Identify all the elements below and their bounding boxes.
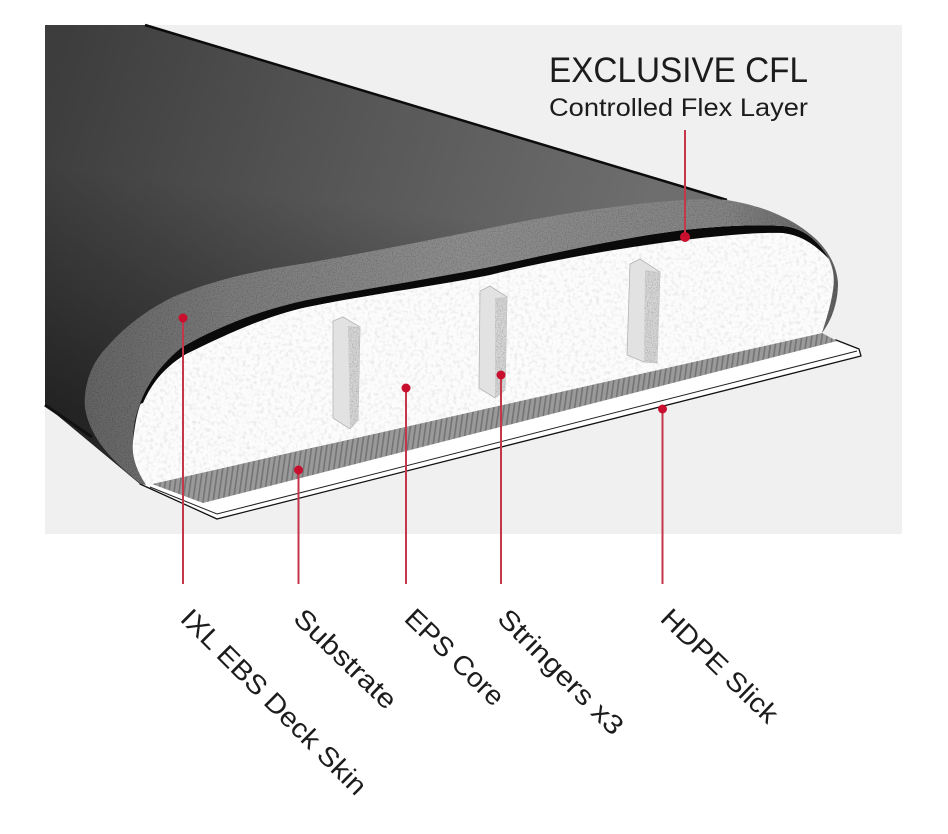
label: HDPE Slick: HDPE Slick <box>655 603 785 730</box>
label: EPS Core: EPS Core <box>399 603 510 712</box>
leader line: HDPE slick <box>658 404 667 584</box>
leader line: deck skin <box>178 314 188 584</box>
leader line: EPS core <box>402 384 410 584</box>
IXL EBS deck skin rail <box>85 199 838 485</box>
leader line: CFL <box>680 130 690 242</box>
HDPE slick base <box>140 340 861 519</box>
stringer 3 <box>627 259 660 363</box>
heading: EXCLUSIVE CFL <box>549 51 808 90</box>
subheading: Controlled Flex Layer <box>549 94 808 122</box>
leader line: substrate <box>294 466 303 584</box>
callout: Exclusive CFL heading <box>549 51 808 122</box>
deck surface <box>45 25 727 484</box>
label: IXL EBS Deck Skin: IXL EBS Deck Skin <box>175 603 373 801</box>
stringer 2 <box>479 286 507 398</box>
EPS foam core <box>133 233 834 485</box>
leader line: stringers <box>496 370 506 584</box>
substrate <box>152 333 837 503</box>
label: Stringers x3: Stringers x3 <box>492 603 630 741</box>
CFL controlled flex layer <box>140 225 829 404</box>
background panel <box>45 25 902 534</box>
board illustration <box>45 25 861 519</box>
stringer 1 <box>333 317 360 429</box>
label: Substrate: Substrate <box>288 603 403 715</box>
